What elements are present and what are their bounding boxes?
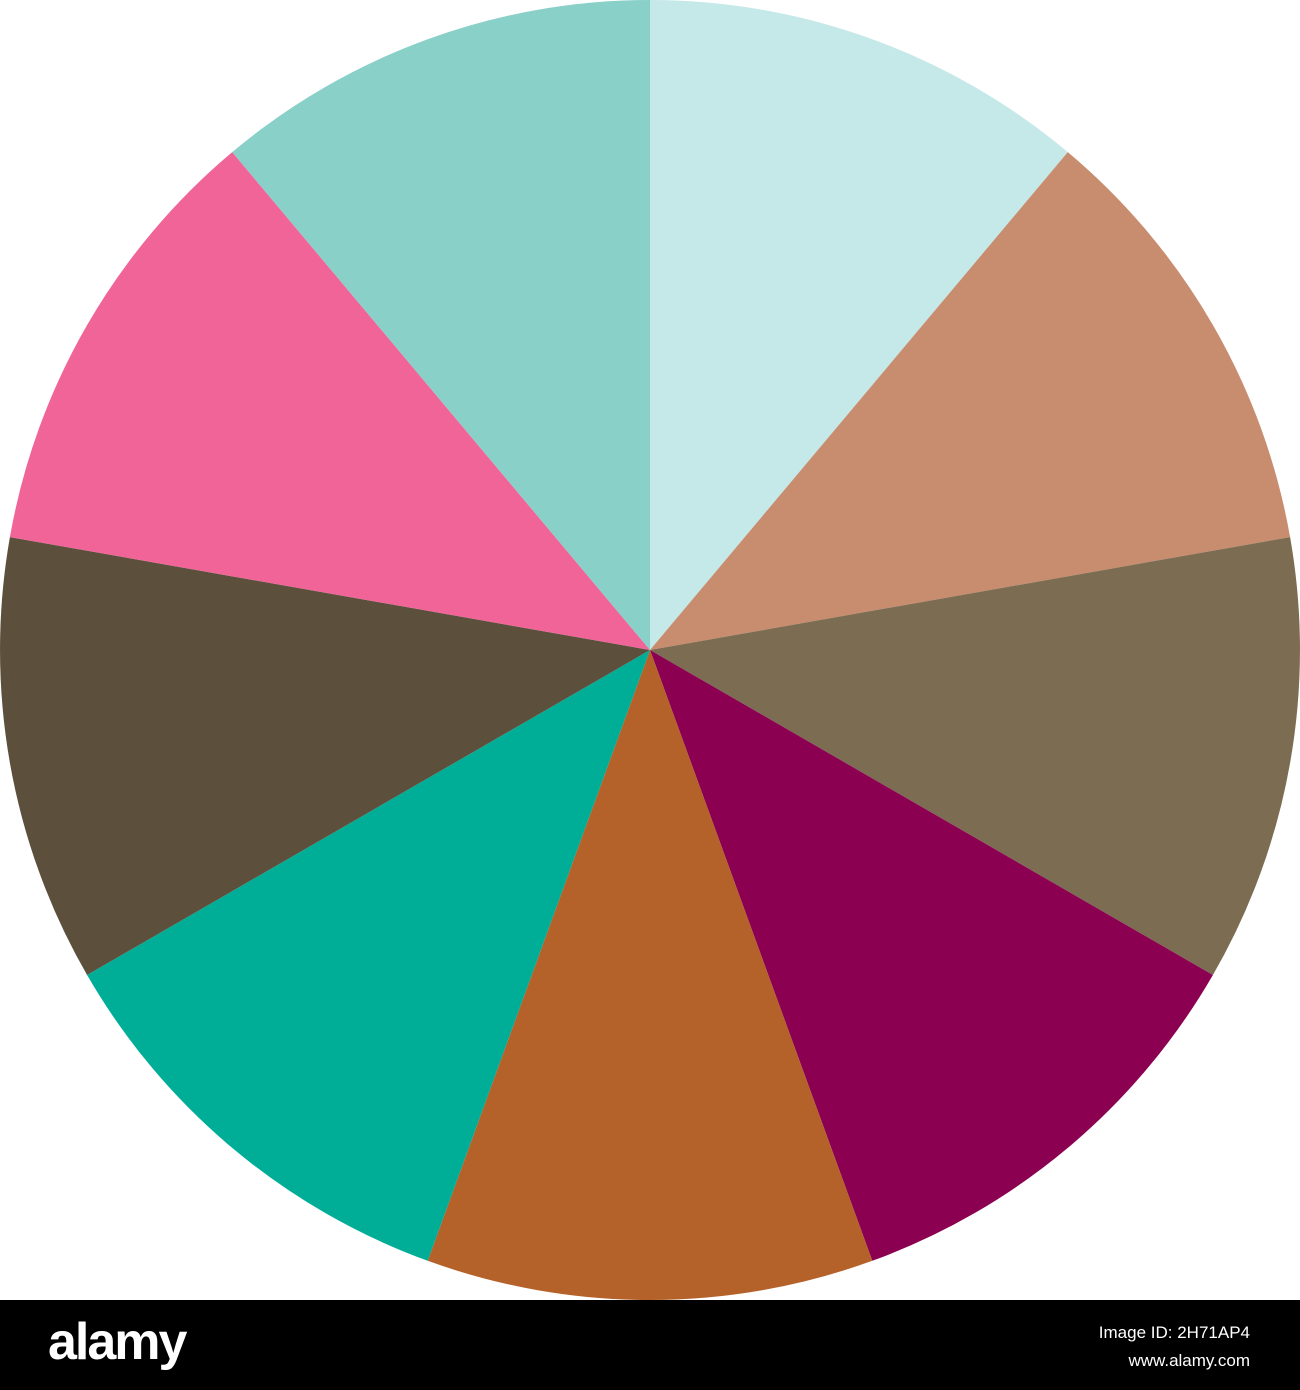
footer logo: alamy <box>48 1313 185 1371</box>
slice: mid teal <box>232 0 650 650</box>
slice: dark brown <box>0 537 650 975</box>
slice: pink <box>10 152 650 650</box>
footer bar <box>0 1300 1300 1390</box>
slice: light cyan <box>650 0 1068 650</box>
slice: taupe <box>650 537 1300 975</box>
footer image id: www.alamy.com <box>1128 1351 1250 1370</box>
slice: maroon <box>650 650 1213 1261</box>
footer image id: Image ID: 2H71AP4 <box>1099 1323 1250 1342</box>
slice: orange brown <box>428 650 872 1300</box>
footer image id <box>1099 1323 1250 1370</box>
slice: teal <box>87 650 650 1261</box>
slice: tan <box>650 152 1290 650</box>
